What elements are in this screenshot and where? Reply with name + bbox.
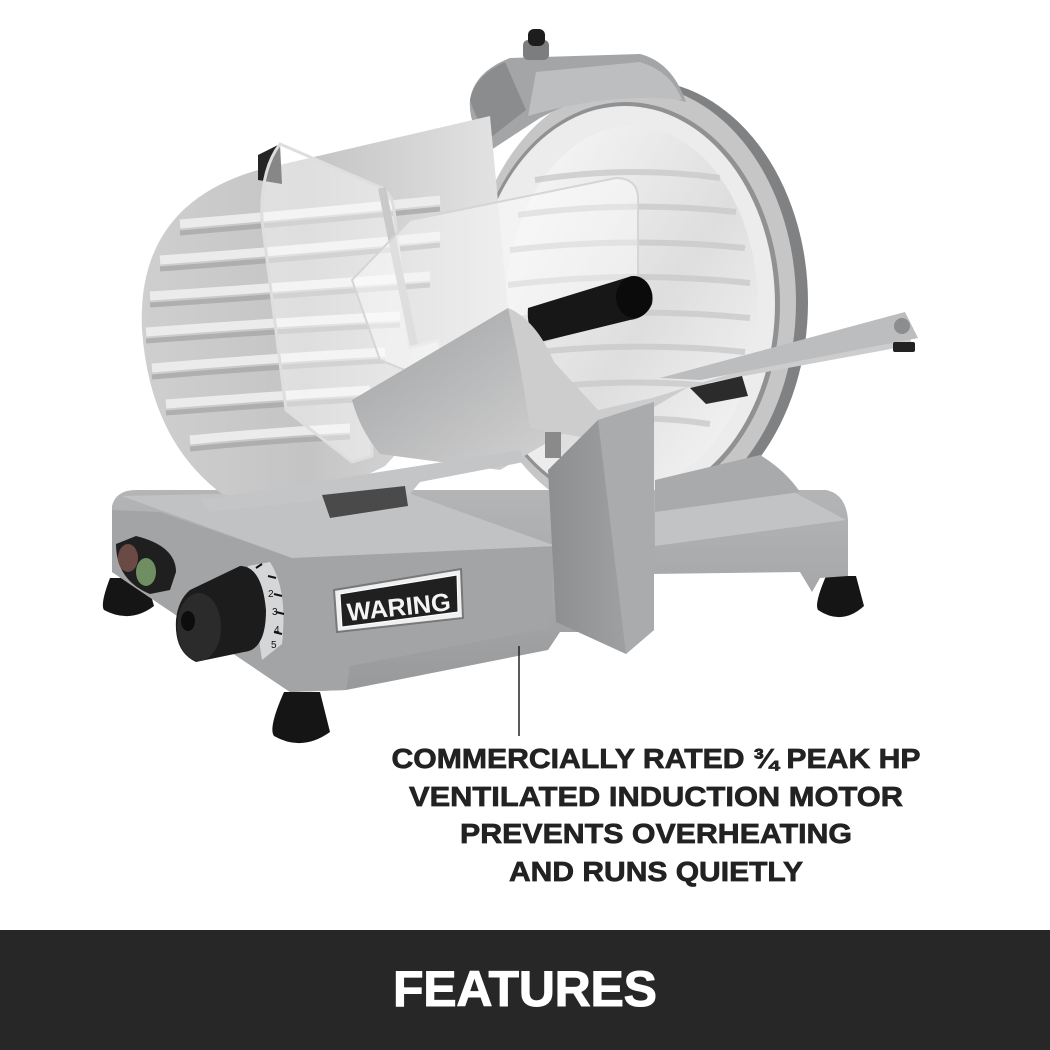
clear thickness plate <box>352 178 638 380</box>
carriage rail and bracket <box>200 450 524 518</box>
icon: black pusher handle <box>528 276 653 342</box>
callout text <box>392 743 920 887</box>
thickness dial: 2 <box>268 589 274 600</box>
thickness dial: 4 <box>274 625 280 636</box>
clear food pusher guard <box>262 144 446 462</box>
slicer base <box>112 455 848 692</box>
icon: rubber feet <box>103 576 864 743</box>
brand badge <box>334 569 463 632</box>
brand badge: WARING <box>346 588 452 627</box>
callout text: COMMERCIALLY RATED ¾ PEAK HP <box>392 743 920 774</box>
icon: top knob <box>523 29 549 60</box>
thickness dial: 3 <box>272 607 278 618</box>
thickness dial: 5 <box>271 640 277 651</box>
callout text: PREVENTS OVERHEATING <box>460 818 852 849</box>
callout leader line <box>518 646 520 736</box>
thickness dial <box>176 562 284 662</box>
callout text: AND RUNS QUIETLY <box>509 856 803 887</box>
product tray and side arm <box>352 308 918 470</box>
callout text: VENTILATED INDUCTION MOTOR <box>409 781 903 812</box>
banner heading: FEATURES <box>393 961 657 1017</box>
support column <box>545 402 654 654</box>
features banner <box>0 930 1050 1050</box>
top blade cover with knob <box>470 29 686 152</box>
indicator buttons <box>116 536 176 594</box>
carriage tray <box>142 116 510 498</box>
blade housing <box>468 80 808 524</box>
circular blade <box>506 126 758 486</box>
